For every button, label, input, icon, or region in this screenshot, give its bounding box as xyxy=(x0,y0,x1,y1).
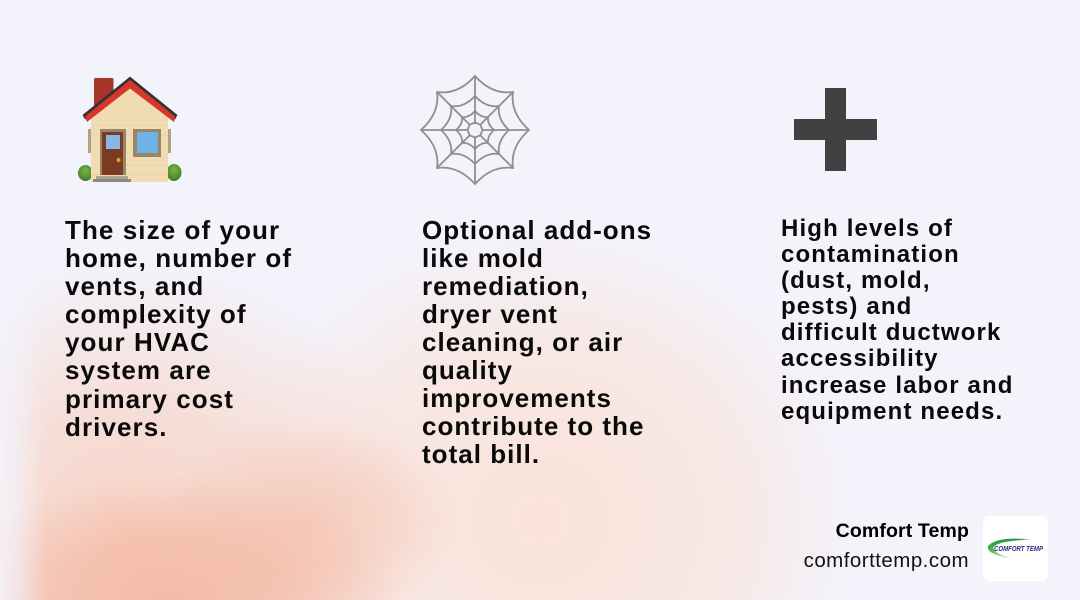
text: home size cost drivers: The size of your xyxy=(65,215,280,245)
text: optional add-ons: cleaning, or air xyxy=(422,327,623,357)
text: contamination and accessibility: increase labor and xyxy=(781,372,1014,399)
text: contamination and accessibility xyxy=(781,215,1014,425)
text: home size cost drivers: system are xyxy=(65,355,212,385)
text: optional add-ons: Optional add-ons xyxy=(422,215,652,245)
text: optional add-ons xyxy=(422,215,652,469)
text: home size cost drivers: home, number of xyxy=(65,243,292,273)
text: contamination and accessibility: pests) and xyxy=(781,293,912,320)
text: home size cost drivers: complexity of xyxy=(65,299,247,329)
text: contamination and accessibility: accessibility xyxy=(781,345,939,372)
text: contamination and accessibility: contamination xyxy=(781,241,960,268)
text: optional add-ons: improvements xyxy=(422,383,612,413)
text: contamination and accessibility: difficult ductwork xyxy=(781,319,1002,346)
text: home size cost drivers xyxy=(65,215,292,442)
text: home size cost drivers: your HVAC xyxy=(65,327,210,357)
text: home size cost drivers: drivers. xyxy=(65,412,168,442)
text: contamination and accessibility: equipment needs. xyxy=(781,398,1003,425)
icon: plus sign xyxy=(794,88,877,171)
text: optional add-ons: quality xyxy=(422,355,513,385)
brand website: comforttemp.com xyxy=(804,549,969,572)
text: optional add-ons: total bill. xyxy=(422,439,540,469)
logo: Comfort Temp xyxy=(983,516,1048,581)
text: home size cost drivers: primary cost xyxy=(65,384,234,414)
icon: house xyxy=(78,76,182,182)
text: optional add-ons: like mold xyxy=(422,243,544,273)
text: optional add-ons: dryer vent xyxy=(422,299,558,329)
text: optional add-ons: contribute to the xyxy=(422,411,644,441)
text: home size cost drivers: vents, and xyxy=(65,271,204,301)
text: contamination and accessibility: (dust, mold, xyxy=(781,267,931,294)
text: optional add-ons: remediation, xyxy=(422,271,589,301)
icon: spider web xyxy=(420,74,530,186)
text: contamination and accessibility: High levels of xyxy=(781,215,953,242)
brand name: Comfort Temp xyxy=(836,520,969,542)
